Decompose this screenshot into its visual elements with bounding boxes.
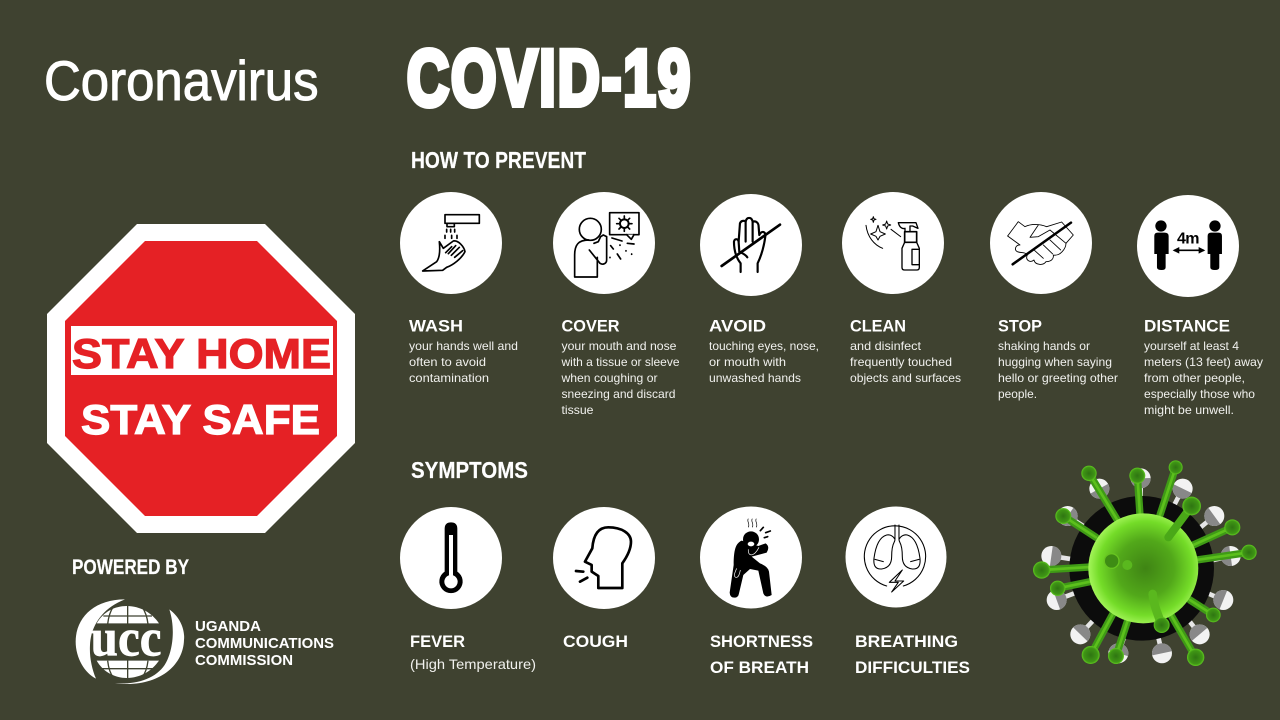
icon: fever thermometer bbox=[400, 507, 502, 609]
text: clean: and disinfect bbox=[850, 339, 922, 353]
heading: how to prevent: HOW TO PREVENT bbox=[411, 147, 586, 173]
text: cover: sneezing and discard bbox=[562, 387, 676, 401]
text: distance bbox=[1144, 316, 1263, 417]
icon: no handshake bbox=[990, 192, 1092, 294]
text: cover: your mouth and nose bbox=[562, 339, 677, 353]
text: wash: often to avoid bbox=[409, 355, 486, 369]
text: fever: (High Temperature) bbox=[410, 656, 536, 672]
text: fever: FEVER bbox=[410, 632, 465, 651]
icon: distance 4m bbox=[1137, 195, 1239, 297]
icon: cough head bbox=[553, 507, 655, 609]
text: stop: hugging when saying bbox=[998, 355, 1112, 369]
text: stop: STOP bbox=[998, 316, 1042, 336]
icon: shortness of breath figure bbox=[700, 506, 802, 608]
illustration: green virus bbox=[1033, 460, 1257, 666]
text: breathing difficulties: BREATHING bbox=[855, 632, 958, 651]
stop sign: STAY SAFE bbox=[81, 396, 320, 443]
text: clean: CLEAN bbox=[850, 316, 906, 336]
logo: Uganda Communications Commission: COMMUNICATIONS bbox=[195, 635, 334, 652]
icon: clean spray bbox=[842, 192, 944, 294]
icon: cover bbox=[553, 192, 655, 294]
text: avoid: unwashed hands bbox=[709, 371, 801, 385]
icon: distance 4m: 4m bbox=[1177, 230, 1199, 248]
text: breathing difficulties bbox=[855, 632, 970, 677]
icon: breathing lungs bbox=[846, 506, 946, 608]
text: fever bbox=[410, 632, 536, 672]
title: Coronavirus: Coronavirus bbox=[44, 51, 319, 113]
text: clean: frequently touched bbox=[850, 355, 952, 369]
text: avoid bbox=[709, 316, 819, 385]
text: stop bbox=[998, 316, 1118, 401]
logo: Uganda Communications Commission: ucc bbox=[91, 609, 161, 668]
logo: Uganda Communications Commission: COMMISSION bbox=[195, 652, 293, 669]
text: shortness of breath: OF BREATH bbox=[710, 658, 809, 677]
text: distance: yourself at least 4 bbox=[1144, 339, 1239, 353]
title: COVID-19: COVID-19 bbox=[407, 33, 692, 122]
text: shortness of breath bbox=[710, 632, 813, 677]
text: cover: with a tissue or sleeve bbox=[561, 355, 680, 369]
text: wash: WASH bbox=[409, 316, 463, 336]
text: distance: especially those who bbox=[1144, 387, 1255, 401]
text: distance: DISTANCE bbox=[1144, 316, 1230, 336]
icon: wash hands bbox=[400, 192, 502, 294]
text: clean: objects and surfaces bbox=[850, 371, 961, 385]
text: cover: COVER bbox=[562, 316, 620, 336]
icon: avoid touching bbox=[700, 194, 802, 296]
text: wash bbox=[409, 316, 518, 385]
logo: Uganda Communications Commission: UGANDA bbox=[195, 618, 261, 635]
text: stop: hello or greeting other bbox=[998, 371, 1118, 385]
text: stop: shaking hands or bbox=[998, 339, 1090, 353]
text: cover: when coughing or bbox=[560, 371, 658, 385]
powered by label: POWERED BY bbox=[72, 556, 189, 579]
text: distance: meters (13 feet) away bbox=[1144, 355, 1263, 369]
text: clean bbox=[850, 316, 961, 385]
text: cover: tissue bbox=[562, 403, 594, 417]
text: wash: contamination bbox=[409, 371, 489, 385]
text: wash: your hands well and bbox=[409, 339, 518, 353]
text: avoid: or mouth with bbox=[709, 355, 786, 369]
stop sign bbox=[47, 224, 355, 533]
text: cover bbox=[560, 316, 680, 417]
text: distance: from other people, bbox=[1144, 371, 1245, 385]
heading: symptoms: SYMPTOMS bbox=[411, 457, 528, 483]
logo: Uganda Communications Commission bbox=[76, 599, 334, 684]
stop sign: STAY HOME bbox=[72, 330, 331, 377]
text: distance: might be unwell. bbox=[1144, 403, 1234, 417]
text: cough: COUGH bbox=[563, 632, 628, 651]
text: shortness of breath: SHORTNESS bbox=[710, 632, 813, 651]
text: avoid: AVOID bbox=[709, 316, 766, 336]
text: avoid: touching eyes, nose, bbox=[709, 339, 819, 353]
text: stop: people. bbox=[998, 387, 1037, 401]
text: breathing difficulties: DIFFICULTIES bbox=[855, 658, 970, 677]
